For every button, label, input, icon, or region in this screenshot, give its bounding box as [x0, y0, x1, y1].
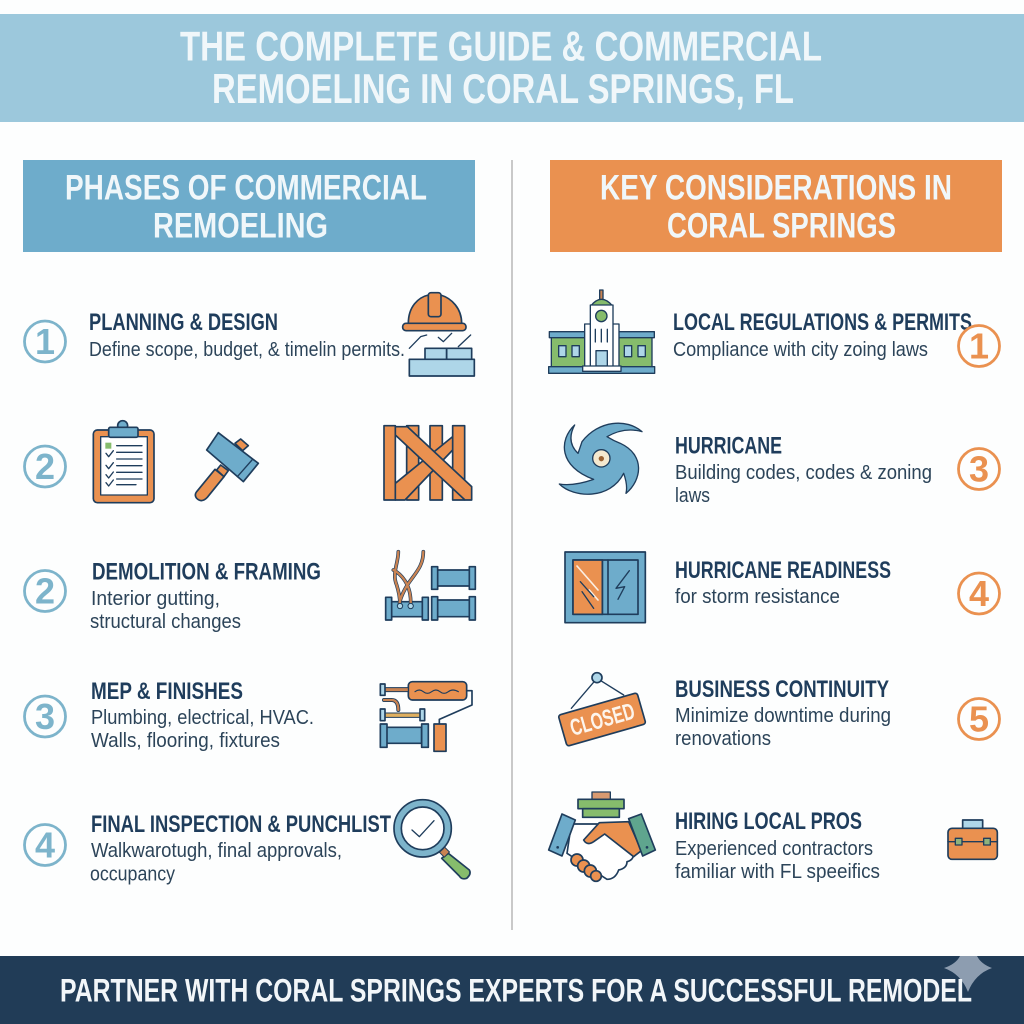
icon: handshake with toolbox: [549, 792, 655, 881]
number badge 3: 3: [969, 448, 989, 490]
consideration row: hiring local pros: [549, 792, 997, 883]
description: MEP: [91, 706, 314, 752]
icon: closed sign: CLOSED: [567, 698, 638, 741]
phase row: final inspection: [24, 800, 470, 886]
heading: planning and design: PLANNING & DESIGN: [89, 309, 278, 336]
description: final inspection: [90, 839, 342, 886]
icon: magnifying glass with check: [394, 800, 470, 879]
number badge 3: [24, 696, 66, 737]
description: MEP: Walls, flooring, fixtures: [91, 729, 280, 752]
description: hurricane: [675, 461, 932, 507]
description: business continuity: renovations: [675, 727, 771, 750]
number badge 4: 4: [35, 824, 55, 866]
number badge 1: [24, 321, 66, 362]
description: hiring local pros: Experienced contractors: [675, 837, 873, 860]
panel heading: phases of commercial remodeling: PHASES OF COMMERCIAL: [65, 168, 427, 208]
icon: hurricane swirl: [559, 423, 642, 494]
number badge 5: [958, 698, 1000, 740]
heading: demolition and framing: DEMOLITION & FRAMING: [92, 558, 321, 586]
description: hiring local pros: familiar with FL speeifics: [675, 860, 880, 883]
description: hurricane: Building codes, codes & zoning: [675, 461, 932, 484]
consideration row: local regulations and permits: [549, 290, 1000, 373]
consideration row: business continuity: [558, 673, 1000, 750]
description: planning: Define scope, budget, & timelin permits.: [89, 338, 405, 361]
number badge 5: 5: [969, 698, 989, 740]
number badge 1: [958, 326, 1000, 366]
number badge 4: 4: [969, 573, 989, 614]
sparkle decoration: [944, 956, 992, 992]
icon: sledgehammer: [195, 433, 258, 501]
description: MEP: Plumbing, electrical, HVAC.: [91, 706, 314, 729]
description: demolition: structural changes: [90, 610, 241, 633]
icon: hard hat and bricks: [403, 293, 474, 376]
heading: business continuity: BUSINESS CONTINUITY: [675, 676, 889, 703]
description: demolition: [90, 587, 241, 633]
phase row: MEP and finishes: [24, 678, 472, 752]
description: local regulations: Compliance with city zoing laws: [673, 338, 928, 361]
heading: hiring local pros: HIRING LOCAL PROS: [675, 808, 862, 835]
footer call to action banner: [0, 956, 1024, 1024]
icon: wood framing: [384, 426, 472, 500]
icon: closed sign: [558, 673, 646, 746]
number badge 2: [24, 570, 66, 612]
phase row: planning and design: [24, 293, 474, 376]
heading: hurricane readiness: HURRICANE READINESS: [675, 557, 891, 584]
description: demolition: Interior gutting,: [91, 587, 220, 610]
number badge 4: [24, 824, 66, 866]
row: clipboard, hammer and framing: [24, 421, 472, 503]
icon: paint roller and plumbing: [380, 682, 472, 751]
icon: city hall: [549, 290, 655, 373]
number badge 2: [24, 446, 66, 487]
panel heading: phases of commercial remodeling: [23, 160, 475, 252]
number badge 3: 3: [35, 696, 55, 737]
icon: pipes and wires: [386, 552, 475, 620]
description: final inspection: occupancy: [90, 862, 176, 886]
description: business continuity: Minimize downtime during: [675, 704, 891, 727]
icon: storm window: [565, 552, 645, 623]
heading: hurricane: HURRICANE: [675, 432, 782, 460]
number badge 4: [958, 573, 1000, 614]
description: business continuity: [675, 704, 891, 750]
panel heading: phases of commercial remodeling: REMOELING: [153, 206, 328, 246]
number badge 2: 2: [35, 570, 55, 612]
icon: clipboard checklist: [93, 421, 154, 503]
title banner: [0, 14, 1024, 122]
description: hurricane: laws: [675, 484, 710, 507]
panel heading: key considerations in coral springs: [550, 160, 1002, 252]
description: hurricane readiness: for storm resistance: [675, 585, 840, 608]
heading: final inspection: FINAL INSPECTION & PUNCHLIST: [91, 811, 391, 838]
consideration row: hurricane: [559, 423, 1000, 507]
title banner: THE COMPLETE GUIDE & COMMERCIAL: [180, 22, 822, 70]
phase row: demolition and framing: [24, 552, 475, 633]
number badge 1: 1: [35, 321, 55, 362]
consideration row: hurricane readiness: [565, 552, 1000, 623]
description: hiring local pros: [675, 837, 880, 883]
heading: MEP and finishes: MEP & FINISHES: [91, 678, 243, 705]
icon: briefcase: [948, 820, 997, 859]
panel heading: key considerations in coral springs: CORAL SPRINGS: [667, 206, 896, 246]
number badge 1: 1: [969, 326, 989, 366]
title banner: REMOELING IN CORAL SPRINGS, FL: [212, 65, 794, 112]
number badge 2: 2: [35, 446, 55, 487]
description: final inspection: Walkwarotugh, final approvals,: [91, 839, 342, 862]
number badge 3: [958, 448, 1000, 490]
